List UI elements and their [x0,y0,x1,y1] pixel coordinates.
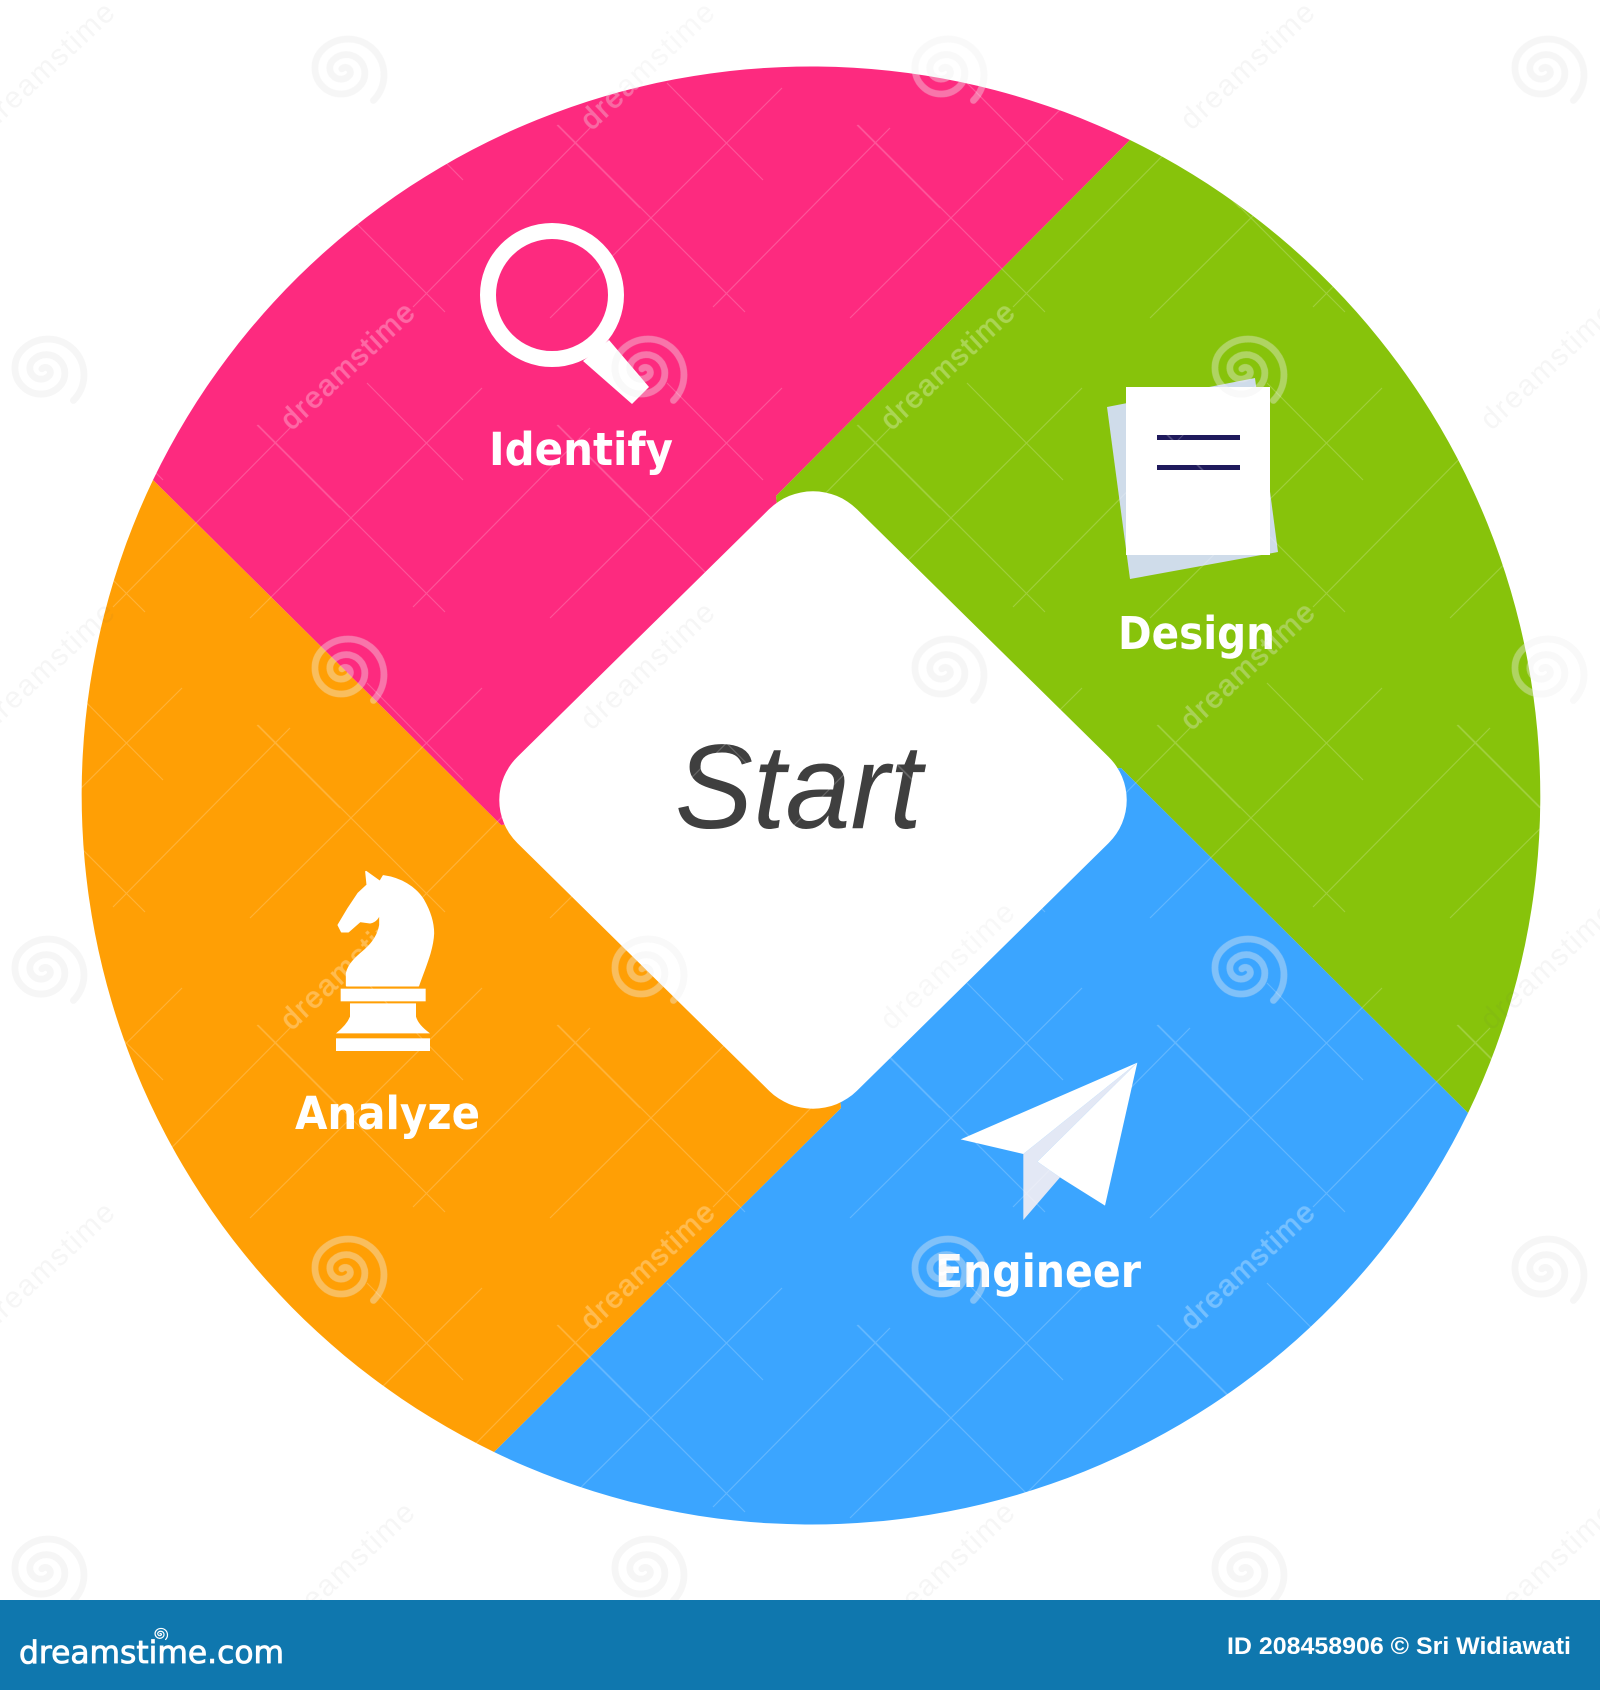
watermark: white layer on colour: dreamstime [874,296,1021,436]
panel: identify [153,67,1130,825]
label: Identify: Identify [489,423,673,476]
watermark: grey layer: dreamstime [1174,596,1321,736]
watermark: grey layer: dreamstime [274,1496,421,1636]
watermark: white layer on colour: dreamstime [574,1196,721,1336]
watermark: white layer on colour: dreamstime [274,296,421,436]
icon: paper plane [961,1063,1137,1220]
footer background [0,1600,1600,1690]
footer logo text: dreamstime.com [19,1635,284,1671]
watermark: white layer on colour [82,74,1540,1518]
watermark: white layer on colour: dreamstime [1174,596,1321,736]
footer logo spiral [153,1626,170,1643]
diamond shape [474,466,1152,1134]
label: Analyze: Analyze [295,1087,480,1140]
watermark: grey layer: dreamstime [874,896,1021,1036]
footer credit: ID 208458906 © Sri Widiawati [1227,1633,1571,1660]
label: Design: Design [1118,607,1275,660]
segment: identify [153,67,1130,825]
segment: analyze [82,480,841,1452]
watermark: grey layer: dreamstime [874,1496,1021,1636]
watermark: white layer on colour: dreamstime [874,896,1021,1036]
watermark: white layer on colour: dreamstime [274,896,421,1036]
icon: document [1107,378,1278,579]
panel: design [776,140,1540,1113]
icon: chess knight [336,872,433,1051]
footer bar [0,1600,1600,1690]
watermark: white layer on colour: dreamstime [1174,1196,1321,1336]
icon: magnifying glass [488,231,649,404]
label: Start: Start [675,720,927,854]
panel: analyze [82,480,841,1452]
watermark: grey layer: dreamstime [574,596,721,736]
segment: engineer [494,768,1468,1524]
panel: engineer [494,768,1468,1524]
center diamond: start [474,466,1152,1134]
segment: design [776,140,1540,1113]
label: Engineer: Engineer [935,1245,1142,1298]
